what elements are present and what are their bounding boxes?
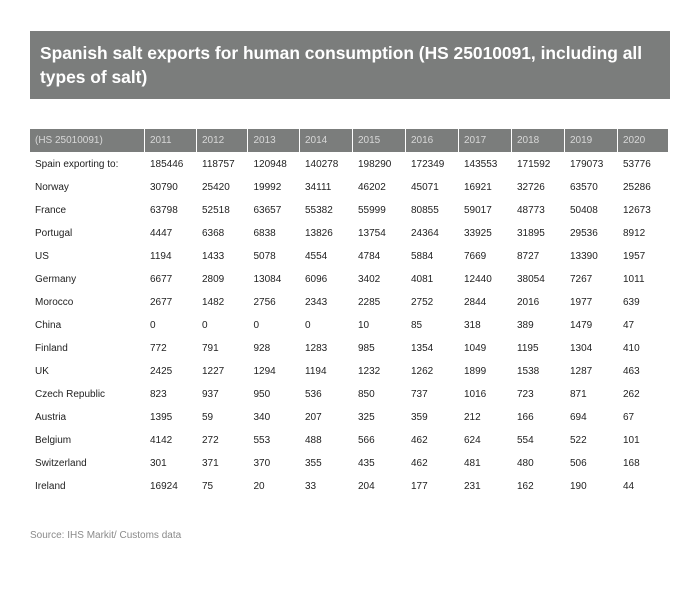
row: US: 4554 — [305, 251, 327, 262]
row: Finland: 1049 — [464, 343, 486, 354]
row: Austria: 325 — [358, 412, 375, 423]
table header row: 2015 — [358, 135, 380, 146]
row: Portugal: 33925 — [464, 228, 492, 239]
row: Portugal: 13754 — [358, 228, 386, 239]
table header row: 2013 — [254, 135, 276, 146]
row: Spain exporting to: 185446 — [150, 159, 183, 170]
row: Spain exporting to: 172349 — [411, 159, 444, 170]
row: Finland: 1283 — [305, 343, 327, 354]
row: Norway: 63570 — [570, 182, 598, 193]
row: US: 1194 — [150, 251, 172, 262]
row: Norway: 16921 — [464, 182, 492, 193]
row: Switzerland: 435 — [358, 458, 375, 469]
row: Czech Republic: 871 — [570, 389, 587, 400]
row: Switzerland: 355 — [305, 458, 322, 469]
row: US: 8727 — [517, 251, 539, 262]
table header row: 2019 — [570, 135, 592, 146]
row: France: 48773 — [517, 205, 545, 216]
row: Morocco: 2285 — [358, 297, 380, 308]
table header row: 2014 — [305, 135, 327, 146]
row: Ireland: 177 — [411, 481, 428, 492]
row: Ireland: 16924 — [150, 481, 178, 492]
row: Norway — [35, 182, 651, 193]
row: France: 55999 — [358, 205, 386, 216]
row: France: 12673 — [623, 205, 651, 216]
row: Czech Republic: 723 — [517, 389, 534, 400]
row: US: 7669 — [464, 251, 486, 262]
row: US: 5884 — [411, 251, 433, 262]
row: Finland: 1354 — [411, 343, 433, 354]
row: Switzerland: 481 — [464, 458, 481, 469]
row: Austria: 359 — [411, 412, 428, 423]
row: Germany: 3402 — [358, 274, 380, 285]
row: UK: 2425 — [150, 366, 172, 377]
row: China: 0 — [202, 320, 208, 331]
row: Portugal — [35, 228, 645, 239]
row: Finland: 772 — [150, 343, 167, 354]
row: Ireland: 190 — [570, 481, 587, 492]
row: Ireland: 33 — [305, 481, 316, 492]
row: Belgium: 272 — [202, 435, 219, 446]
row: Ireland: 75 — [202, 481, 213, 492]
row: France — [35, 205, 651, 216]
row: Spain exporting to: 120948 — [254, 159, 287, 170]
row: Spain exporting to: 171592 — [517, 159, 550, 170]
row: Belgium: 4142 — [150, 435, 172, 446]
row: Czech Republic: 937 — [202, 389, 219, 400]
row: China: 1479 — [570, 320, 592, 331]
row: Spain exporting to: 179073 — [570, 159, 603, 170]
row: UK: UK — [35, 366, 49, 377]
row: China: 389 — [517, 320, 534, 331]
row: Germany: 7267 — [570, 274, 592, 285]
row: Morocco — [35, 297, 640, 308]
row: Morocco: 2752 — [411, 297, 433, 308]
row: Czech Republic: 262 — [623, 389, 640, 400]
row: US: 1957 — [623, 251, 645, 262]
row: Finland: 1304 — [570, 343, 592, 354]
row: US: 13390 — [570, 251, 598, 262]
row: Belgium: 624 — [464, 435, 481, 446]
row: Belgium: Belgium — [35, 435, 71, 446]
row: Austria: 212 — [464, 412, 481, 423]
row: Ireland: 44 — [623, 481, 634, 492]
row: China: China — [35, 320, 61, 331]
row: Portugal: 29536 — [570, 228, 598, 239]
row: Austria: 207 — [305, 412, 322, 423]
row: UK: 1262 — [411, 366, 433, 377]
row: Spain exporting to: 53776 — [623, 159, 651, 170]
row: US — [35, 251, 645, 262]
row: Finland: 1195 — [517, 343, 539, 354]
row: Norway: 25286 — [623, 182, 651, 193]
row: Portugal: 4447 — [150, 228, 172, 239]
row: Morocco: 2016 — [517, 297, 539, 308]
row: UK: 1287 — [570, 366, 592, 377]
row: Morocco: 2756 — [254, 297, 276, 308]
row: China: 0 — [150, 320, 156, 331]
row: Portugal: 6368 — [202, 228, 224, 239]
row: Norway: 45071 — [411, 182, 439, 193]
row: Switzerland: 480 — [517, 458, 534, 469]
row: China: 0 — [254, 320, 259, 331]
row: UK: 463 — [623, 366, 640, 377]
row: Ireland: 20 — [254, 481, 265, 492]
table header row: 2011 — [150, 135, 172, 146]
row: Germany: 13084 — [254, 274, 281, 285]
row: Finland: 410 — [623, 343, 640, 354]
row: Germany: 6677 — [150, 274, 172, 285]
row: Spain exporting to — [35, 159, 651, 170]
row: UK: 1232 — [358, 366, 380, 377]
row: Ireland: Ireland — [35, 481, 66, 492]
row: UK: 1227 — [202, 366, 224, 377]
table header row: 2012 — [202, 135, 224, 146]
row: China: 85 — [411, 320, 422, 331]
row: Finland — [35, 343, 640, 354]
row: Ireland: 162 — [517, 481, 534, 492]
row: Morocco: 639 — [623, 297, 640, 308]
row: Spain exporting to: 143553 — [464, 159, 497, 170]
row: Germany: 4081 — [411, 274, 433, 285]
row: Portugal: Portugal — [35, 228, 72, 239]
row: Austria: 340 — [254, 412, 270, 423]
row: Czech Republic: 1016 — [464, 389, 486, 400]
row: Norway: 25420 — [202, 182, 230, 193]
row: Austria: 694 — [570, 412, 587, 423]
row: Belgium — [35, 435, 640, 446]
row: Finland: 928 — [254, 343, 270, 354]
row: Morocco: 1482 — [202, 297, 224, 308]
table header row: (HS 25010091) — [35, 135, 103, 146]
source note: Source: IHS Markit/ Customs data — [30, 530, 181, 541]
row: Spain exporting to: Spain exporting to: — [35, 159, 118, 170]
row: France: France — [35, 205, 66, 216]
row: Germany: Germany — [35, 274, 76, 285]
row: UK: 1899 — [464, 366, 486, 377]
row: Switzerland: Switzerland — [35, 458, 87, 469]
row: Spain exporting to: 198290 — [358, 159, 391, 170]
row: Portugal: 31895 — [517, 228, 545, 239]
row: Belgium: 522 — [570, 435, 587, 446]
row: Switzerland: 462 — [411, 458, 428, 469]
row: Czech Republic: 850 — [358, 389, 375, 400]
row: Germany: 1011 — [623, 274, 645, 285]
row: Germany: 6096 — [305, 274, 327, 285]
row: Czech Republic: 950 — [254, 389, 270, 400]
row: Belgium: 101 — [623, 435, 640, 446]
data table — [30, 129, 668, 492]
row: Austria — [35, 412, 634, 423]
table header row: 2016 — [411, 135, 433, 146]
row: Morocco: Morocco — [35, 297, 73, 308]
row: China: 10 — [358, 320, 369, 331]
row: Germany: 12440 — [464, 274, 492, 285]
row: Morocco: 2677 — [150, 297, 172, 308]
title banner: Spanish salt exports for human consumption (HS 25010091, including all types of salt) — [40, 43, 642, 87]
row: Norway: 46202 — [358, 182, 386, 193]
row: France: 63657 — [254, 205, 281, 216]
row: Switzerland — [35, 458, 640, 469]
row: Switzerland: 370 — [254, 458, 270, 469]
row: US: 1433 — [202, 251, 224, 262]
row: Portugal: 8912 — [623, 228, 645, 239]
row: UK: 1194 — [305, 366, 327, 377]
row: Norway: 30790 — [150, 182, 178, 193]
row: US: 4784 — [358, 251, 380, 262]
row: Austria: 67 — [623, 412, 634, 423]
row: Morocco: 2343 — [305, 297, 327, 308]
row: UK: 1538 — [517, 366, 539, 377]
row: Austria: 166 — [517, 412, 534, 423]
row: Portugal: 24364 — [411, 228, 439, 239]
row: Austria: Austria — [35, 412, 66, 423]
table header row — [30, 129, 668, 152]
row: Morocco: 1977 — [570, 297, 592, 308]
row: Belgium: 554 — [517, 435, 534, 446]
row: Finland: Finland — [35, 343, 68, 354]
row: Morocco: 2844 — [464, 297, 486, 308]
row: Portugal: 6838 — [254, 228, 276, 239]
row: Belgium: 553 — [254, 435, 270, 446]
row: Finland: 985 — [358, 343, 375, 354]
row: China: 47 — [623, 320, 634, 331]
row: Belgium: 566 — [358, 435, 375, 446]
row: Czech Republic: 536 — [305, 389, 322, 400]
row: Portugal: 13826 — [305, 228, 333, 239]
title banner — [30, 31, 670, 99]
row: Ireland: 204 — [358, 481, 375, 492]
row: France: 59017 — [464, 205, 492, 216]
row: Austria: 59 — [202, 412, 213, 423]
row: UK — [35, 366, 640, 377]
row: France: 80855 — [411, 205, 439, 216]
table header row: 2020 — [623, 135, 645, 146]
row: China: 318 — [464, 320, 481, 331]
row: Belgium: 462 — [411, 435, 428, 446]
row: Ireland — [35, 481, 634, 492]
row: Norway: Norway — [35, 182, 69, 193]
row: France: 52518 — [202, 205, 230, 216]
row: UK: 1294 — [254, 366, 276, 377]
row: Spain exporting to: 140278 — [305, 159, 338, 170]
row: China — [35, 320, 634, 331]
row: Czech Republic: 737 — [411, 389, 428, 400]
row: Switzerland: 301 — [150, 458, 167, 469]
row: France: 55382 — [305, 205, 333, 216]
row: Czech Republic: 823 — [150, 389, 167, 400]
row: Germany — [35, 274, 645, 285]
table header row: 2018 — [517, 135, 539, 146]
row: Switzerland: 371 — [202, 458, 219, 469]
row: Spain exporting to: 118757 — [202, 159, 235, 170]
row: Czech Republic: Czech Republic — [35, 389, 105, 400]
row: France: 50408 — [570, 205, 598, 216]
table header row: 2017 — [464, 135, 486, 146]
row: Germany: 38054 — [517, 274, 545, 285]
row: Norway: 32726 — [517, 182, 545, 193]
row: Ireland: 231 — [464, 481, 481, 492]
row: Germany: 2809 — [202, 274, 224, 285]
row: Finland: 791 — [202, 343, 219, 354]
row: Belgium: 488 — [305, 435, 322, 446]
row: Switzerland: 168 — [623, 458, 640, 469]
row: China: 0 — [305, 320, 311, 331]
row: France: 63798 — [150, 205, 178, 216]
row: US: 5078 — [254, 251, 276, 262]
row: Switzerland: 506 — [570, 458, 587, 469]
row: Austria: 1395 — [150, 412, 172, 423]
row: Czech Republic — [35, 389, 640, 400]
row: US: US — [35, 251, 49, 262]
row: Norway: 19992 — [254, 182, 281, 193]
row: Norway: 34111 — [305, 182, 331, 193]
